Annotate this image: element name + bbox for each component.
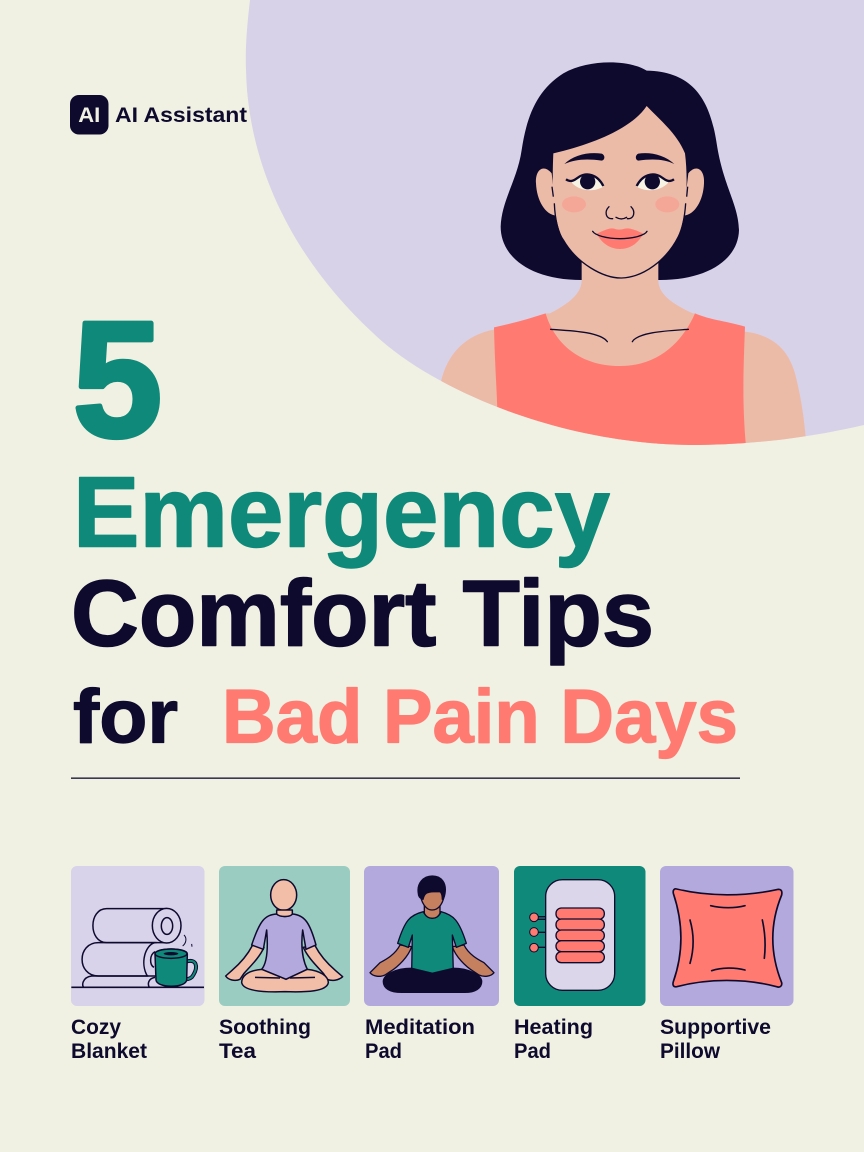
logo name: AI Assistant xyxy=(115,104,247,127)
neck xyxy=(550,262,693,314)
label: Soothing Tea xyxy=(219,1016,311,1063)
face xyxy=(553,106,687,278)
eyelids xyxy=(566,174,603,186)
icon: seated figure in lavender xyxy=(226,880,343,992)
label: Meditation Pad: Meditation xyxy=(365,1016,475,1039)
card: Cozy Blanket xyxy=(71,866,204,1006)
logo badge xyxy=(70,95,108,134)
card background xyxy=(71,866,204,1006)
smile line xyxy=(593,231,647,239)
card background xyxy=(514,866,646,1006)
jaw line xyxy=(552,187,688,278)
card background xyxy=(660,866,794,1006)
icon: pillow xyxy=(673,889,782,987)
collarbones xyxy=(551,329,688,342)
label: Cozy Blanket: Cozy xyxy=(71,1016,121,1039)
label: Soothing Tea: Soothing xyxy=(219,1016,311,1039)
label: Supportive Pillow xyxy=(660,1016,771,1063)
hair xyxy=(501,62,739,280)
card background xyxy=(364,866,499,1006)
card: Soothing Tea xyxy=(219,866,350,1006)
label: Supportive Pillow: Supportive xyxy=(660,1016,771,1039)
label: Cozy Blanket: Blanket xyxy=(71,1040,147,1063)
title line: Emergency: Emergency xyxy=(73,456,610,568)
label: Meditation Pad xyxy=(365,1016,475,1063)
label: Soothing Tea: Tea xyxy=(219,1040,256,1063)
illustration: woman portrait xyxy=(440,62,807,460)
eyebrows xyxy=(564,153,604,164)
lavender background shape xyxy=(246,0,864,445)
cheeks xyxy=(562,196,586,212)
shoulders xyxy=(441,313,806,445)
card background xyxy=(219,866,350,1006)
title line: Comfort Tips: Comfort Tips xyxy=(71,560,654,666)
icon: meditating person xyxy=(370,876,494,992)
label: Heating Pad: Heating xyxy=(514,1016,593,1039)
label: Meditation Pad: Pad xyxy=(365,1040,402,1063)
labels xyxy=(71,1016,771,1063)
title xyxy=(71,288,738,760)
card: Heating Pad xyxy=(514,866,646,1006)
label: Cozy Blanket xyxy=(71,1016,147,1063)
label: Heating Pad xyxy=(514,1016,593,1063)
icon: heating pad xyxy=(530,880,615,990)
label: Supportive Pillow: Pillow xyxy=(660,1040,721,1063)
logo: AI Assistant xyxy=(70,95,247,134)
eyes xyxy=(572,176,603,190)
card: Meditation Pad xyxy=(364,866,499,1006)
title phrase: Bad Pain Days: Bad Pain Days xyxy=(222,674,738,760)
label: Heating Pad: Pad xyxy=(514,1040,551,1063)
coral top xyxy=(494,313,746,445)
title number: 5 xyxy=(73,288,162,471)
card: Supportive Pillow xyxy=(660,866,794,1006)
ears xyxy=(536,169,557,216)
title word: for: for xyxy=(73,674,178,760)
icon: blankets and mug xyxy=(71,908,204,987)
lips xyxy=(597,228,643,249)
nose xyxy=(606,207,634,219)
logo badge letters: AI xyxy=(78,104,100,127)
